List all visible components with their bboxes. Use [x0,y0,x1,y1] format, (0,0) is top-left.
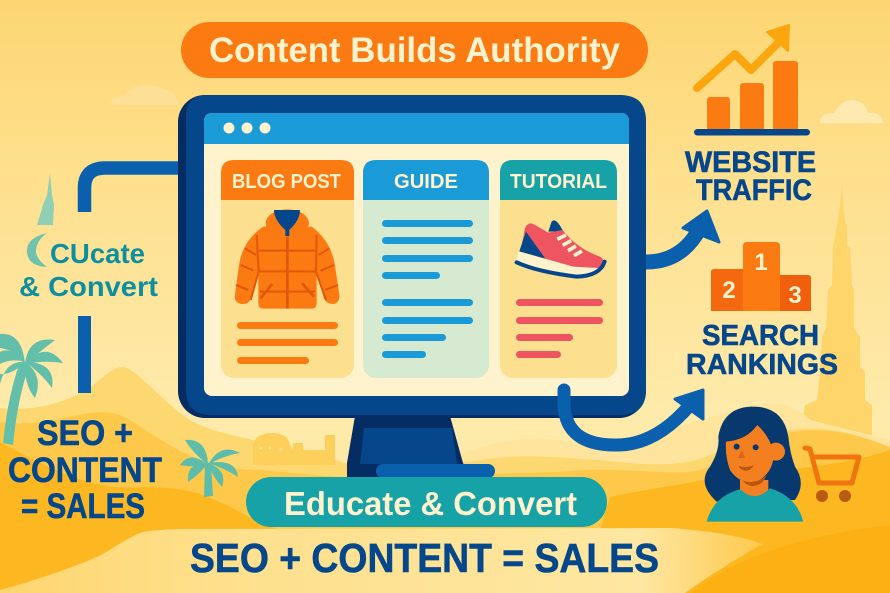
icon: podium [711,242,811,311]
text: seo plus content equals sales stacked: = SALES [21,487,145,526]
icon: rising bar chart [694,25,810,136]
icon: running shoe [516,220,605,277]
text lines [237,322,338,364]
text lines [516,299,603,358]
icon: crescent [27,233,47,267]
icon: podium: 3 [788,282,802,309]
monitor [178,95,646,418]
text: cucate and convert: & Convert [19,271,158,302]
icon: podium: 2 [722,277,736,304]
text: seo plus content equals sales: SEO + CONTENT = SALES [190,535,659,581]
icon: small palm tree [180,440,240,497]
text: website traffic: TRAFFIC [696,174,812,207]
icon: left palm tree [0,334,63,445]
educate and convert pill [246,477,607,527]
text: seo plus content equals sales stacked [8,414,162,526]
panel: blog post: BLOG POST [232,171,341,193]
icon: customer [705,407,803,522]
connector: left elbow [84,168,180,212]
text: search rankings [686,320,838,381]
text: website traffic: WEBSITE [685,146,816,179]
panel: tutorial: TUTORIAL [510,171,607,193]
text: seo plus content equals sales stacked: CONTENT [8,451,162,490]
educate and convert pill: Educate & Convert [284,485,577,522]
browser bar [204,113,629,144]
title pill: Content Builds Authority [209,31,621,70]
arrow: to search rankings [564,390,703,445]
icon: podium: 1 [754,249,768,276]
background: clouds [110,85,883,123]
panel: tutorial [500,160,617,378]
panel: guide: GUIDE [394,171,458,193]
background: domed town [253,433,335,465]
text: search rankings: SEARCH [702,320,819,352]
arrow: to website traffic [646,211,719,262]
icon: shopping cart [805,448,859,502]
screen [204,113,629,396]
panel: guide [363,160,489,378]
background: left mini tower [37,173,54,225]
text: cucate and convert: CUcate [50,238,145,269]
text: search rankings: RANKINGS [686,349,838,381]
text: cucate and convert [19,238,158,302]
background: hills [0,367,890,593]
icon: orange jacket [235,209,339,309]
text lines [382,220,473,358]
background: right tower [800,183,872,440]
connector: left lower segment [78,316,91,393]
panel: blog post [221,160,354,378]
monitor stand [347,416,495,478]
title pill [181,22,648,78]
text: website traffic [685,146,816,207]
text: seo plus content equals sales stacked: SEO + [37,414,133,453]
